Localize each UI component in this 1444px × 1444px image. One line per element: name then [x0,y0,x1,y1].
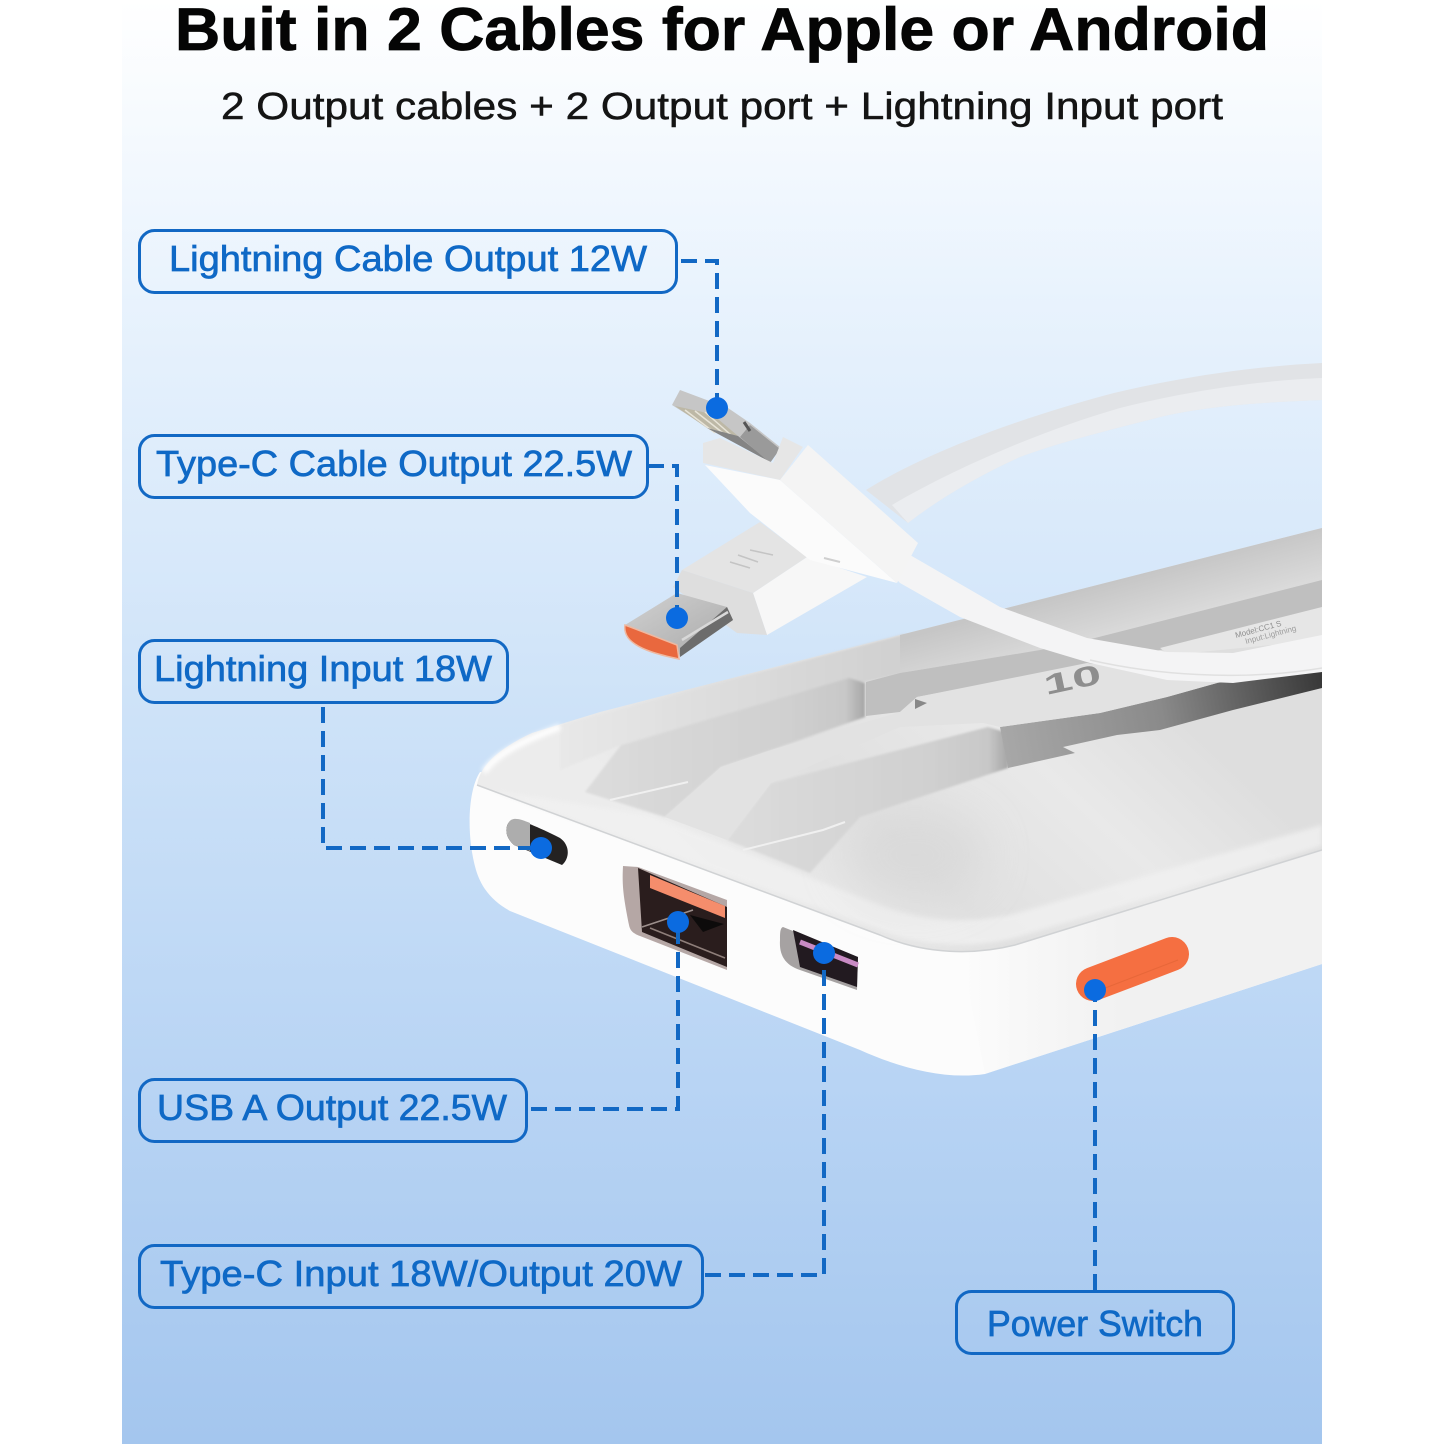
groove one [585,678,865,817]
far panel [900,528,1322,673]
power bank body: Input:Lightning [1244,624,1297,646]
callout: Type-C Cable Output: Type-C Cable Output 22.5W [156,443,632,484]
white right face [780,445,918,583]
metal lower side [707,428,770,462]
callout: Lightning Input [140,640,552,859]
type-C connector [625,522,867,659]
cable trough [1000,664,1322,768]
power bank body [470,528,1322,1076]
callout: Lightning Input: Lightning Input 18W [154,648,492,689]
top face [682,522,807,593]
body side [470,772,1322,1076]
side face [753,557,867,635]
callout: Lightning Cable Output [140,230,728,419]
front collar [673,570,767,635]
callout: Power Switch [956,979,1234,1354]
groove one floor line [610,782,688,800]
callout: Type-C Input/Output: Type-C Input 18W/Output 20W [160,1253,682,1294]
metal pins [675,406,738,436]
orange tongue [650,875,725,918]
subtitle: 2 Output cables + 2 Output port + Lightning Input port [221,86,1223,128]
callout: Lightning Cable Output: Lightning Cable Output 12W [169,238,647,279]
collar [703,437,803,480]
far left panel [768,634,904,698]
groove two floor line [743,822,845,850]
top-surface edge line [477,785,1322,952]
stowed cable [665,663,1217,840]
callout: USB A Output: USB A Output 22.5W [157,1087,507,1128]
orange mouth [625,625,679,659]
metal top [672,390,780,462]
callout: USB A Output [140,911,689,1142]
product illustration: power bank with cables [470,363,1323,1076]
body top surface [477,635,1322,951]
USB-C input port [506,819,568,865]
groove two [727,727,1008,873]
metal shell [625,593,733,657]
label plate [1160,607,1322,650]
hump shade [845,810,985,900]
label text plate: Model:CC1 S [1234,619,1282,640]
USB-C output port [780,927,858,990]
USB-A port [623,866,727,970]
callout: Type-C Input/Output [140,942,835,1308]
stowed flat cable [888,555,1322,683]
lightning connector [672,390,918,583]
cable loop [866,363,1323,523]
callout: Power Switch: Power Switch [987,1303,1203,1344]
power switch [1093,954,1178,990]
front highlight strip [817,826,1322,944]
notch mark [915,699,927,709]
white left face [705,465,897,583]
left corner highlight [484,727,560,772]
callout: Type-C Cable Output [140,436,688,629]
inset band [866,580,1322,716]
capacity mark: 10 [1041,658,1104,701]
